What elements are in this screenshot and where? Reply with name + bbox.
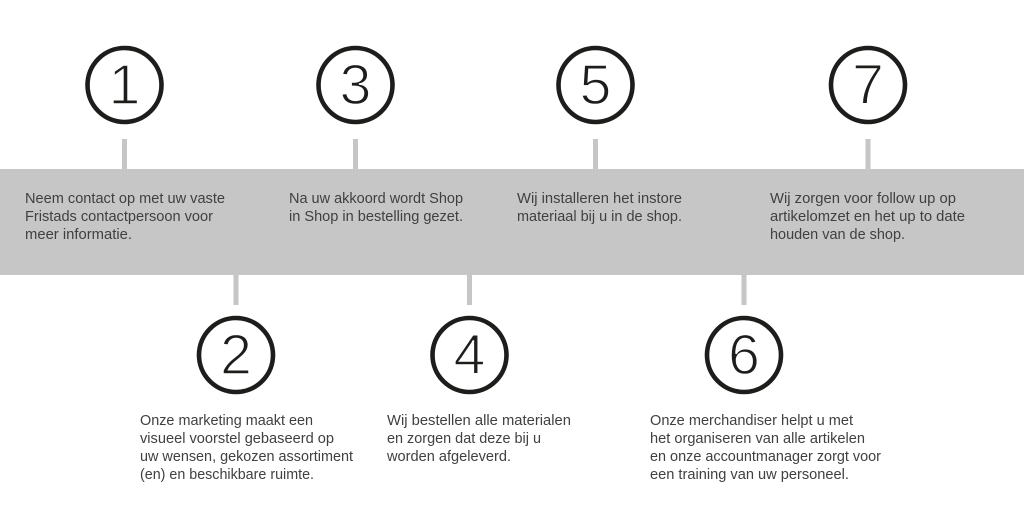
text 4: en zorgen dat deze bij u (387, 431, 541, 447)
connector 5 (593, 139, 598, 169)
text 1: Fristads contactpersoon voor (25, 209, 213, 225)
text 6: en onze accountmanager zorgt voor (650, 449, 881, 465)
text 1: Neem contact op met uw vaste (25, 191, 225, 207)
number circle 4: 4 (454, 323, 485, 387)
text 3: Na uw akkoord wordt Shop (289, 191, 463, 207)
number circle 4 (432, 318, 506, 392)
text 2: (en) en beschikbare ruimte. (140, 467, 314, 483)
step 4 (386, 275, 571, 465)
text 5: Wij installeren het instore (517, 191, 682, 207)
number circle 5: 5 (580, 53, 611, 117)
text 7: houden van de shop. (770, 227, 905, 243)
connector 1 (122, 139, 127, 169)
text 5: materiaal bij u in de shop. (517, 209, 682, 225)
text 4: worden afgeleverd. (386, 449, 511, 465)
step 6 (650, 275, 881, 483)
connector 2 (234, 275, 238, 305)
number circle 6 (707, 318, 781, 392)
step 2 (140, 275, 353, 483)
number circle 2 (199, 318, 273, 392)
text 4: Wij bestellen alle materialen (387, 413, 571, 429)
text 1: meer informatie. (25, 227, 132, 243)
text 7 (770, 191, 965, 243)
number circle 1 (88, 48, 162, 122)
text 2: Onze marketing maakt een (140, 413, 313, 429)
number circle 7: 7 (852, 53, 884, 117)
text 4 (386, 413, 571, 465)
text 3 (289, 191, 463, 225)
number circle 6: 6 (728, 323, 760, 387)
step 7 (770, 48, 965, 243)
text 2: visueel voorstel gebaseerd op (140, 431, 334, 447)
connector 4 (467, 275, 472, 305)
step 5 (517, 48, 682, 225)
grey band (0, 169, 1024, 275)
step 1 (25, 48, 225, 243)
number circle 5 (558, 48, 632, 122)
number circle 7 (831, 48, 905, 122)
text 3: in Shop in bestelling gezet. (289, 209, 463, 225)
text 2 (140, 413, 353, 483)
text 1 (25, 191, 225, 243)
text 7: Wij zorgen voor follow up op (770, 191, 956, 207)
number circle 1: 1 (109, 53, 140, 117)
step 3 (289, 48, 463, 225)
connector 7 (866, 139, 870, 169)
text 6: het organiseren van alle artikelen (650, 431, 865, 447)
text 6 (650, 413, 881, 483)
number circle 3: 3 (340, 53, 371, 117)
text 2: uw wensen, gekozen assortiment (140, 449, 353, 465)
connector 6 (742, 275, 746, 305)
number circle 3 (318, 48, 392, 122)
text 7: artikelomzet en het up to date (770, 209, 965, 225)
text 5 (517, 191, 682, 225)
text 6: een training van uw personeel. (650, 467, 849, 483)
number circle 2: 2 (220, 323, 252, 387)
connector 3 (353, 139, 358, 169)
text 6: Onze merchandiser helpt u met (650, 413, 853, 429)
